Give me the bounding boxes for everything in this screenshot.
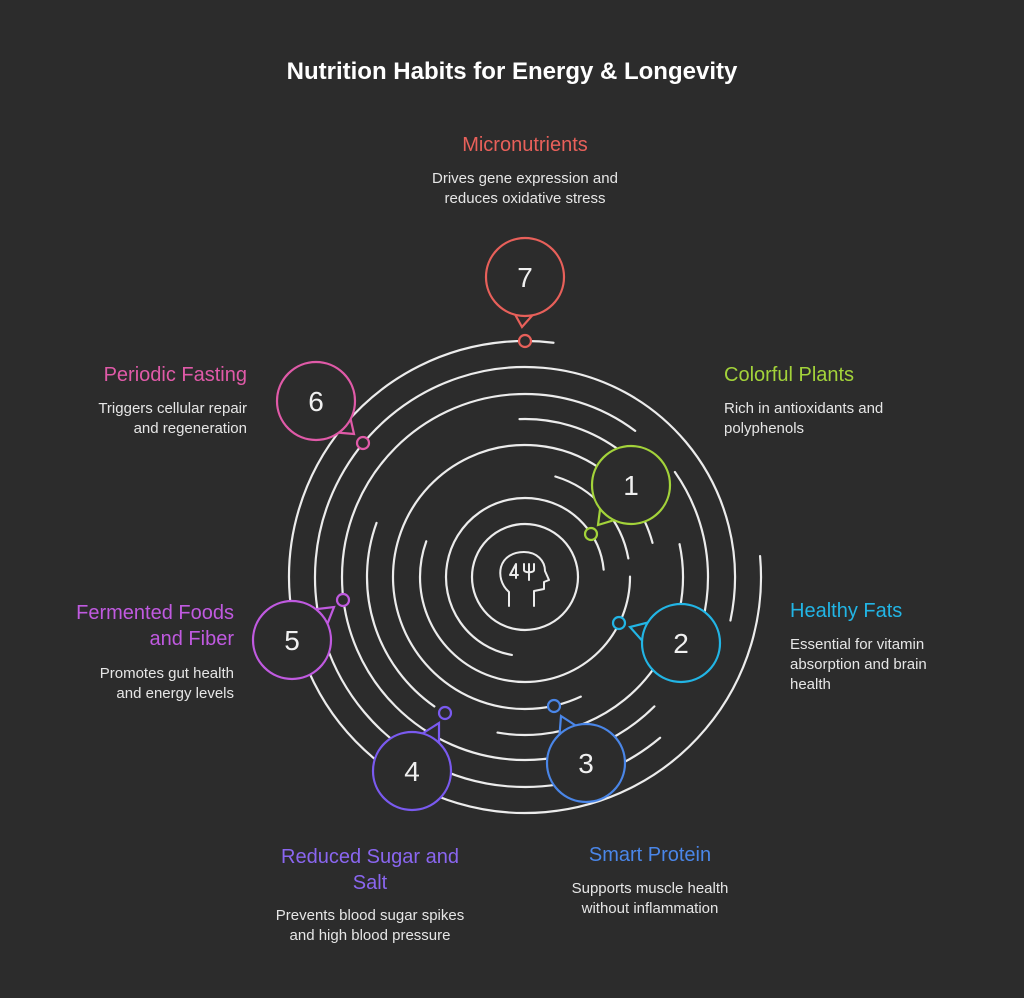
label 5: Fermented Foods and Fiber: Promotes gut health [100, 665, 234, 682]
label 1: Colorful Plants: Rich in antioxidants and [724, 400, 883, 417]
label 2: Healthy Fats: Healthy Fats [790, 600, 902, 622]
label 2: Healthy Fats: Essential for vitamin [790, 636, 924, 653]
bubble 2 [613, 604, 720, 682]
label 6: Periodic Fasting: Periodic Fasting [104, 364, 247, 386]
label 7: Micronutrients: Micronutrients [462, 134, 588, 156]
bubble 2: 2 [673, 628, 689, 659]
label 2: Healthy Fats: absorption and brain [790, 656, 927, 673]
label 7: Micronutrients: Drives gene expression and [432, 170, 618, 187]
label 5: Fermented Foods and Fiber [76, 602, 234, 702]
label 2: Healthy Fats: health [790, 676, 831, 693]
bubble 6: 6 [308, 386, 324, 417]
bubble 4 [373, 707, 451, 810]
bubble 4: 4 [404, 756, 420, 787]
icon: head with fork and knife [500, 552, 549, 606]
bubble 5: 5 [284, 625, 300, 656]
label 4: Reduced Sugar and Salt: Prevents blood sugar spikes [276, 907, 464, 924]
label 1: Colorful Plants: polyphenols [724, 420, 804, 437]
bubble 5 [253, 594, 349, 679]
label 5: Fermented Foods and Fiber: and energy levels [116, 685, 234, 702]
label 6: Periodic Fasting: Triggers cellular repair [98, 400, 247, 417]
bubble 3: 3 [578, 748, 594, 779]
label 3: Smart Protein: without inflammation [582, 900, 718, 917]
bubble 1 [585, 446, 670, 540]
label 7: Micronutrients [432, 134, 618, 207]
label 1: Colorful Plants: Colorful Plants [724, 364, 854, 386]
bubble 1: 1 [623, 470, 639, 501]
label 1: Colorful Plants [724, 364, 883, 437]
label 7: Micronutrients: reduces oxidative stress [445, 190, 605, 207]
label 4: Reduced Sugar and Salt: and high blood pressure [290, 927, 450, 944]
bubble 7: 7 [517, 262, 533, 293]
label 6: Periodic Fasting: and regeneration [134, 420, 247, 437]
label 3: Smart Protein: Supports muscle health [572, 880, 728, 897]
bubble 6 [277, 362, 369, 449]
label 3: Smart Protein: Smart Protein [589, 844, 711, 866]
bubble 3 [547, 700, 625, 802]
label 2: Healthy Fats [790, 600, 927, 693]
label 3: Smart Protein [572, 844, 728, 917]
label 4: Reduced Sugar and Salt [276, 846, 464, 944]
label 4: Reduced Sugar and Salt: Reduced Sugar and [281, 846, 459, 868]
label 6: Periodic Fasting [98, 364, 247, 437]
label 5: Fermented Foods and Fiber: Fermented Foods [76, 602, 234, 624]
bubble 7 [486, 238, 564, 347]
title: Nutrition Habits for Energy & Longevity [287, 58, 737, 85]
label 4: Reduced Sugar and Salt: Salt [353, 872, 387, 894]
label 5: Fermented Foods and Fiber: and Fiber [150, 628, 234, 650]
